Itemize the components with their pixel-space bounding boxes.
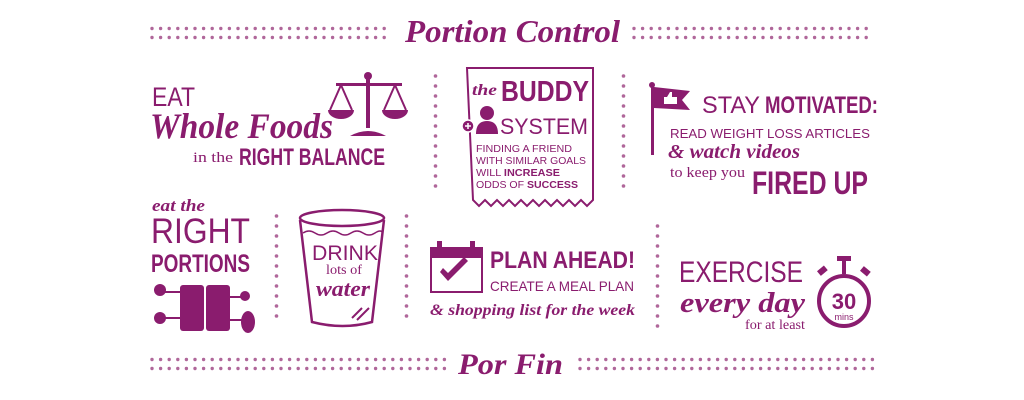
icon: scales [328,72,408,136]
icon: stopwatch: mins [834,312,854,322]
icon: stopwatch [817,256,871,326]
title: Portion Control [404,13,620,49]
panel: buddy system [462,68,593,206]
panel: exercise: EXERCISE [679,256,803,289]
icon: flag [649,82,690,155]
panel: right portions: eat the [152,196,206,215]
panel: buddy system: ODDS OF SUCCESS [476,179,578,191]
header dotted lines [152,28,874,38]
panel: drink water: DRINK [312,242,378,265]
divider dots [276,76,658,336]
icon: stopwatch: 30 [832,289,856,314]
panel: stay motivated: READ WEIGHT LOSS ARTICLES [670,126,870,141]
panel: stay motivated [649,82,878,201]
panel: drink water: water [316,276,370,301]
panel: right portions: PORTIONS [151,250,250,278]
footer dotted lines [152,360,874,368]
panel: buddy system: WILL INCREASE [476,167,560,179]
panel: plan ahead: CREATE A MEAL PLAN [490,278,634,294]
panel: stay motivated: MOTIVATED: [765,92,878,119]
panel: drink water [300,210,384,326]
panel: drink water: lots of [326,263,362,278]
panel: eat whole foods: Whole Foods [150,106,333,146]
icon: person plus [462,106,498,134]
panel: buddy system: WITH SIMILAR GOALS [476,155,586,167]
icon: plate diagram [154,284,255,333]
panel: exercise: for at least [745,318,805,333]
panel: right portions: RIGHT [151,212,250,251]
panel: stay motivated: FIRED UP [752,165,868,201]
panel: eat whole foods [150,72,408,171]
panel: eat whole foods: in the [193,150,233,166]
panel: stay motivated: & watch videos [668,141,800,163]
panel: eat whole foods: EAT [152,82,195,112]
panel: plan ahead: & shopping list for the week [430,302,635,319]
panel: eat whole foods: RIGHT BALANCE [239,144,385,171]
panel: buddy system: FINDING A FRIEND [476,143,572,155]
panel: plan ahead [430,241,635,319]
panel: plan ahead: PLAN AHEAD! [490,247,635,274]
panel: buddy system: the [472,82,497,99]
panel: buddy system: BUDDY [501,76,589,108]
icon: calendar [431,241,482,292]
panel: exercise [679,256,871,333]
panel: exercise: every day [680,288,806,319]
footer title: Por Fin [457,348,563,381]
panel: right portions [151,196,255,333]
panel: buddy system: SYSTEM [500,114,588,139]
panel: stay motivated: STAY [702,92,760,119]
panel: stay motivated: to keep you [670,165,746,181]
